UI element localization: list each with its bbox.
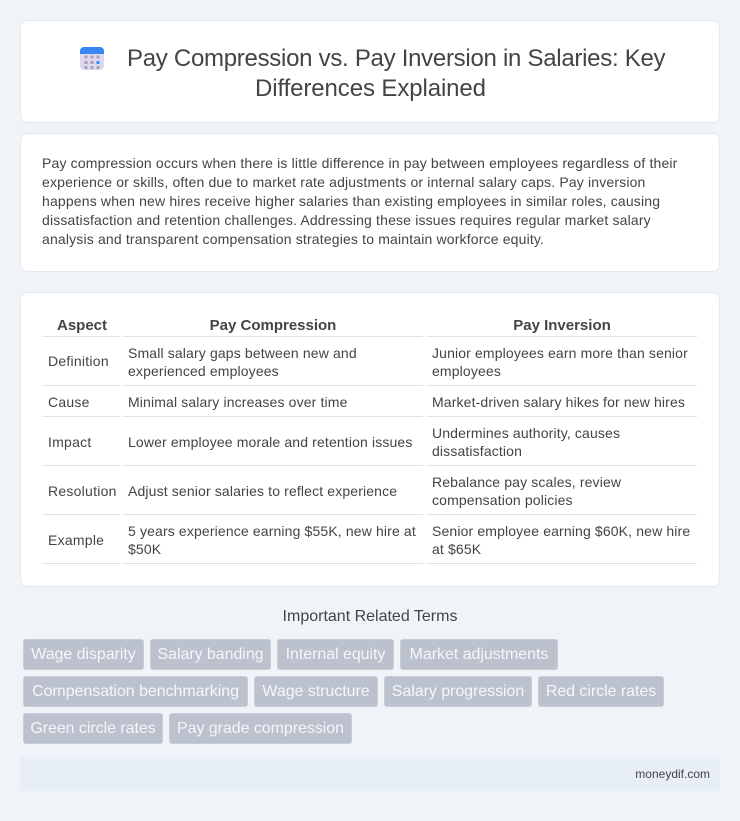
table: experienced employees [128,363,279,379]
tag [23,639,144,670]
tag: Market adjustments [410,646,548,663]
tag: Internal equity [286,646,385,663]
tag [538,676,664,707]
footer bar [20,757,720,791]
row: cause: Cause [48,394,90,410]
comparison table panel [20,292,720,587]
table: at $65K [432,541,481,557]
table: Adjust senior salaries to reflect experience [128,483,397,499]
intro panel [20,133,720,272]
header: aspect: Aspect [57,317,107,334]
icon: calendar [80,47,104,70]
header panel [20,20,720,123]
tag [150,639,271,670]
table: Lower employee morale and retention issues [128,434,412,450]
row: resolution: Resolution [48,483,117,499]
table: 5 years experience earning $55K, new hire at [128,523,416,539]
title [127,45,666,102]
table: Undermines authority, causes [432,425,620,441]
table: employees [432,363,501,379]
tag [254,676,378,707]
title: Differences Explained [255,75,486,102]
tag [23,676,248,707]
table: Senior employee earning $60K, new hire [432,523,690,539]
row: example: Example [48,532,104,548]
table: Rebalance pay scales, review [432,474,621,490]
intro text: dissatisfaction and retention challenges. Addressing these issues requires regular market salary [42,212,651,228]
intro text: happens when new hires receive higher salaries than existing employees in similar roles, causing [42,193,660,209]
table: Market-driven salary hikes for new hires [432,394,685,410]
row: definition: Definition [48,353,109,369]
tag: Pay grade compression [177,720,344,737]
intro text: analysis and transparent compensation strategies to maintain workforce equity. [42,231,544,247]
intro text [42,155,678,247]
title: Pay Compression vs. Pay Inversion in Salaries: Key [127,45,665,72]
table: $50K [128,541,161,557]
related terms heading: Important Related Terms [283,608,457,625]
intro text: Pay compression occurs when there is little difference in pay between employees regardless of their [42,155,678,171]
tag: Wage disparity [31,646,136,663]
intro text: experience or skills, often due to market rate adjustments or internal salary caps. Pay inversion [42,174,646,190]
tag: Green circle rates [30,720,156,737]
table [43,317,697,564]
tag [277,639,394,670]
table: Small salary gaps between new and [128,345,357,361]
tag: Compensation benchmarking [32,683,239,700]
tag: Wage structure [262,683,370,700]
tag [169,713,352,744]
table: Minimal salary increases over time [128,394,348,410]
footer source: moneydif.com [635,767,710,781]
tag [400,639,558,670]
table: dissatisfaction [432,443,522,459]
table: compensation policies [432,492,573,508]
tag [384,676,532,707]
header: pay inversion: Pay Inversion [513,317,611,334]
header: pay compression: Pay Compression [210,317,336,334]
tag: Salary progression [392,683,524,700]
related terms tags [23,639,664,744]
tag: Red circle rates [546,683,656,700]
table: Junior employees earn more than senior [432,345,688,361]
tag [23,713,163,744]
tag: Salary banding [157,646,264,663]
row: impact: Impact [48,434,92,450]
